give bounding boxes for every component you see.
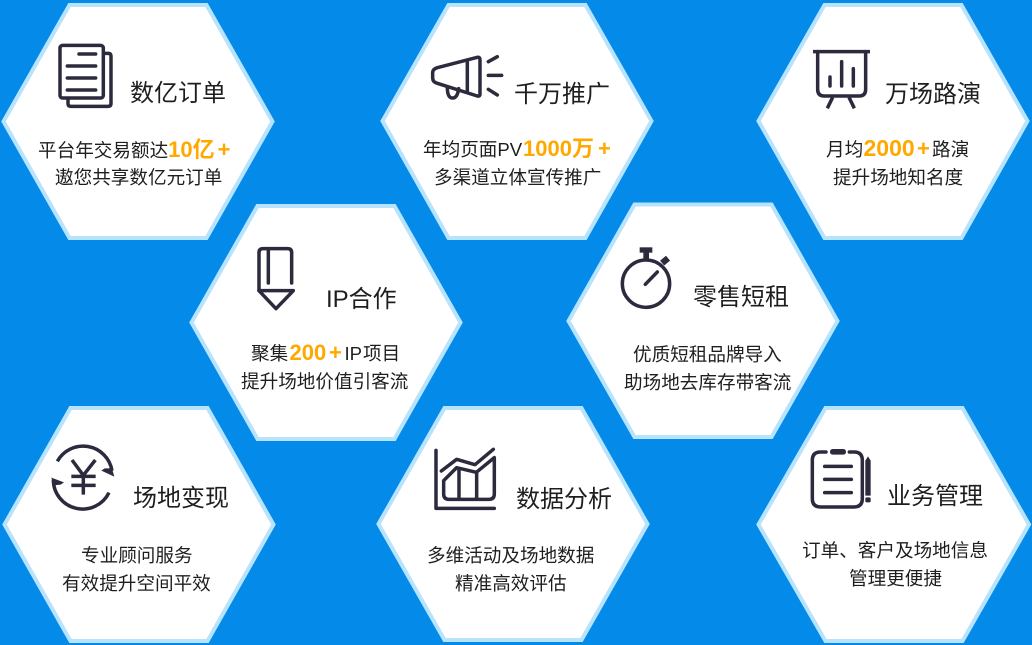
- text block: 路演: [932, 139, 969, 160]
- heading: 数亿订单: [130, 80, 226, 107]
- heading: 千万推广: [514, 81, 610, 108]
- text block: [427, 545, 594, 594]
- panel: 数据分析: [378, 408, 648, 640]
- heading: 零售短租: [693, 284, 789, 311]
- text block: [826, 135, 969, 188]
- icon: megaphone: [433, 57, 502, 98]
- text block: 年均页面PV: [423, 139, 522, 160]
- panel: 万场路演: [758, 5, 1028, 238]
- text block: 优质短租品牌导入: [633, 344, 782, 365]
- text block: 遨您共享数亿元订单: [55, 167, 222, 188]
- text block: 项目: [363, 343, 400, 364]
- text block: IP: [344, 343, 362, 364]
- hexagon: [4, 5, 272, 238]
- text block: 多维活动及场地数据: [427, 545, 594, 566]
- heading: 数据分析: [516, 486, 612, 513]
- icon: clipboard and pen: [812, 449, 871, 507]
- text block: +: [598, 136, 611, 161]
- icon: stopwatch: [622, 247, 670, 307]
- text block: [802, 540, 988, 589]
- text block: 平台年交易额达10亿+: [38, 137, 231, 162]
- text block: 有效提升空间平效: [62, 573, 211, 594]
- heading: 业务管理: [887, 483, 983, 510]
- text block: [624, 344, 791, 393]
- panel: 零售短租: [568, 204, 838, 437]
- text block: 助场地去库存带客流: [624, 372, 791, 393]
- panel: 业务管理: [758, 408, 1029, 641]
- panel: 场地变现: [4, 408, 274, 641]
- panel: IP合作: [192, 206, 460, 439]
- heading: 场地变现: [133, 485, 229, 512]
- text block: +: [917, 136, 930, 161]
- text block: 提升场地知名度: [833, 167, 963, 188]
- icon: presentation board: [813, 52, 870, 108]
- text block: +: [329, 340, 342, 365]
- text block: [241, 340, 408, 392]
- text block: 提升场地价值引客流: [241, 371, 408, 392]
- hexagon: [758, 408, 1029, 641]
- text block: [62, 545, 211, 594]
- text block: 1000万: [523, 136, 594, 161]
- text block: 聚集: [251, 343, 288, 364]
- icon: chart: [436, 449, 494, 508]
- hexagon: [4, 408, 274, 641]
- hexagon: [192, 206, 460, 439]
- text block: 200: [290, 340, 326, 365]
- hexagon: [568, 204, 838, 437]
- text block: 专业顾问服务: [81, 545, 193, 566]
- text block: 月均: [826, 139, 863, 160]
- hexagon: [382, 5, 652, 238]
- panel: 数亿订单: [4, 5, 272, 238]
- hexagon: [378, 408, 648, 640]
- icon: pencil: [259, 249, 293, 309]
- heading: IP合作: [326, 286, 397, 313]
- icon: yen exchange: [51, 446, 114, 509]
- icon: documents: [60, 45, 111, 106]
- text block: 多渠道立体宣传推广: [434, 167, 601, 188]
- text block: [423, 136, 611, 188]
- heading: 万场路演: [885, 81, 981, 108]
- text block: 精准高效评估: [455, 573, 567, 594]
- text block: [38, 137, 231, 188]
- text block: 2000: [864, 135, 915, 161]
- hexagon: [758, 5, 1028, 238]
- panel: 千万推广: [382, 5, 652, 238]
- text block: 管理更便捷: [849, 568, 942, 589]
- text block: 订单、客户及场地信息: [802, 540, 988, 561]
